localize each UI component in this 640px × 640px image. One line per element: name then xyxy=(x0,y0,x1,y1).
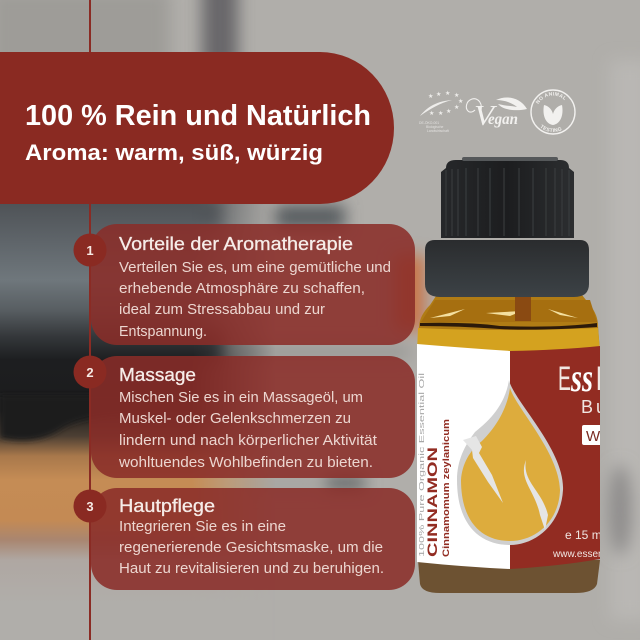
body 2: Muskel- oder Gelenkschmerzen zu xyxy=(119,411,351,427)
brand text: E xyxy=(595,360,618,398)
body 1: Entspannung. xyxy=(119,324,207,340)
icon: EU organic leaf: Landwirtschaft xyxy=(427,129,449,133)
body 2: lindern und nach körperlicher Aktivität xyxy=(119,433,377,449)
icon: EU organic leaf: DE-ÖKO-001 xyxy=(419,121,439,125)
icon: EU organic leaf: ★ xyxy=(446,108,451,115)
brand text: ss xyxy=(570,355,593,400)
body 1 xyxy=(119,260,391,340)
body 3: Integrieren Sie es in eine xyxy=(119,519,286,535)
icon: vegan: egan xyxy=(488,111,518,128)
icon: EU organic leaf: ★ xyxy=(428,93,433,100)
badge 3: 3 xyxy=(86,499,94,514)
brand text: www.essen xyxy=(552,549,604,560)
body 3: regenerierende Gesichtsmaske, um die xyxy=(119,540,383,556)
bottle xyxy=(417,157,618,593)
icon: EU organic leaf: ★ xyxy=(454,92,459,99)
product name: 100% Pure Organic Essential Oil xyxy=(419,372,426,557)
icon: vegan: V xyxy=(474,101,497,132)
body 2: wohltuendes Wohlbefinden zu bieten. xyxy=(118,455,373,471)
icon: no animal testing: NO ANIMAL xyxy=(536,92,566,104)
card 2: Massage xyxy=(74,356,415,478)
heading 2: Massage xyxy=(119,365,196,385)
header banner xyxy=(0,52,394,204)
icon: EU organic leaf: Biologische xyxy=(426,125,443,129)
product name xyxy=(419,372,452,557)
icon: EU organic leaf: ★ xyxy=(438,110,443,117)
body 1: ideal zum Stressabbau und zur xyxy=(119,302,325,318)
body 3 xyxy=(119,519,384,577)
badge 1: 1 xyxy=(86,243,94,258)
title: 100 % Rein und Natürlich xyxy=(25,100,371,132)
icon: EU organic leaf: ★ xyxy=(445,90,450,97)
badge 3 xyxy=(74,490,106,522)
icon: EU organic leaf xyxy=(419,90,463,133)
icon: no animal testing xyxy=(530,89,576,135)
icon: EU organic leaf: ★ xyxy=(458,98,463,105)
heading 1: Vorteile der Aromatherapie xyxy=(119,234,353,254)
label xyxy=(417,344,618,569)
collar xyxy=(425,240,589,297)
body 2: Mischen Sie es in ein Massageöl, um xyxy=(119,390,363,406)
badge 1 xyxy=(74,234,106,266)
icon: EU organic leaf: ★ xyxy=(429,110,434,117)
drop icon xyxy=(457,380,563,545)
icon: EU organic leaf: ★ xyxy=(436,91,441,98)
subtitle: Aroma: warm, süß, würzig xyxy=(25,140,323,165)
icon: vegan xyxy=(466,97,527,132)
product name: Cinnamomum zeylanicum xyxy=(441,419,452,557)
badge 2 xyxy=(74,356,106,388)
icon: EU organic leaf: ★ xyxy=(454,104,459,111)
brand text: Bu xyxy=(581,397,609,417)
badge 2: 2 xyxy=(86,365,94,380)
body 3: Haut zu revitalisieren und zu beruhigen. xyxy=(119,561,384,577)
brand text: Wo xyxy=(586,428,608,445)
heading 3: Hautpflege xyxy=(119,496,215,516)
dropper cap xyxy=(441,157,574,238)
body 1: Verteilen Sie es, um eine gemütliche und xyxy=(119,260,391,276)
body 2 xyxy=(118,390,377,471)
amber glass xyxy=(417,290,600,352)
product name: CINNAMON xyxy=(425,447,440,557)
icon: no animal testing: TESTING xyxy=(540,124,562,132)
vertical timeline line xyxy=(89,0,91,640)
brand text: E xyxy=(558,360,571,398)
body 1: erhebende Atmosphäre zu schaffen, xyxy=(119,281,365,297)
brand text xyxy=(553,366,600,557)
bottom of glass xyxy=(418,560,600,593)
brand text: e 15 m xyxy=(565,528,602,542)
card 1: Aromatherapie xyxy=(74,224,415,345)
card 3: Hautpflege xyxy=(74,488,415,590)
